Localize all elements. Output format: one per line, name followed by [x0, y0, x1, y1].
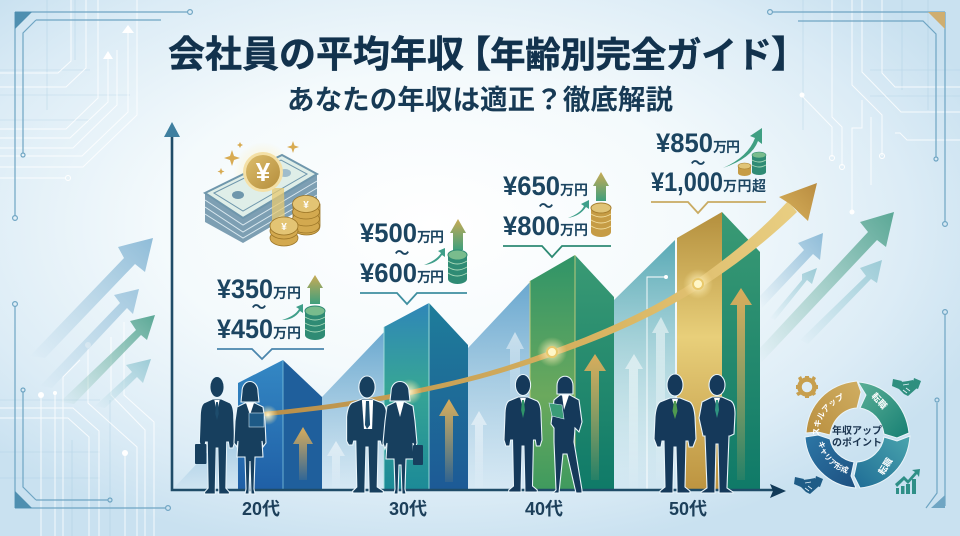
- decorative arrows right: [760, 212, 894, 364]
- age labels: 20代: [242, 499, 280, 519]
- icon: arrow and coins: [723, 128, 766, 176]
- title: 会社員の平均年収: [168, 24, 464, 78]
- price label: 50s: ～: [690, 152, 706, 173]
- price label: 30s: ¥600: [360, 258, 417, 288]
- person: man 40s: [504, 374, 542, 492]
- segment: job change: [858, 382, 909, 438]
- price label: 50s: ¥1,000: [651, 167, 723, 197]
- price label: 20s: 万円: [273, 283, 301, 303]
- bar: 30s: [322, 303, 468, 490]
- sparkles: [218, 141, 299, 175]
- money icon: ¥: [281, 222, 287, 233]
- person: woman 40s: [549, 376, 582, 493]
- segment: promotion: [854, 436, 910, 488]
- person: woman 20s: [234, 382, 266, 494]
- money icon: [205, 141, 320, 246]
- icon: handshake blue: [794, 476, 823, 494]
- price label: 40s: [503, 171, 611, 257]
- icon: arrow and coins: [282, 275, 325, 340]
- price label: 40s: 万円: [560, 180, 588, 200]
- price label: 40s: ～: [538, 195, 554, 216]
- price label: 20s: ～: [251, 296, 267, 317]
- title: 年齢別完全ガイド: [490, 27, 772, 78]
- label: skill up: スキルアップ: [813, 393, 842, 436]
- price label: 50s: [651, 128, 766, 213]
- decorative arrows left: [30, 238, 155, 408]
- price label: 20s: [217, 274, 325, 359]
- center label: のポイント: [832, 434, 882, 449]
- icon: arrow and coins: [568, 172, 611, 237]
- icon: gear: [796, 376, 818, 398]
- price label: 20s: 万円: [273, 323, 301, 343]
- subtitle: あなたの年収は適正？徹底解説: [287, 77, 674, 117]
- label: promotion: 転職: [875, 455, 895, 477]
- age labels: [242, 499, 707, 519]
- center label: [832, 422, 882, 449]
- title: 】: [771, 24, 808, 78]
- age labels: 30代: [389, 499, 427, 519]
- price label: 40s: ¥650: [503, 171, 560, 201]
- price label: 40s: ¥800: [503, 211, 560, 241]
- donut: career points: [804, 380, 910, 488]
- icon: arrow and coins: [424, 219, 467, 284]
- age labels: 50代: [669, 499, 707, 519]
- price label: 40s: 万円: [560, 220, 588, 240]
- person: man 50s arms crossed: [699, 374, 735, 493]
- price label: 50s: 万円超: [723, 176, 766, 196]
- money icon: ¥: [303, 200, 309, 211]
- segment: career: [805, 435, 856, 488]
- price label: 30s: 万円: [417, 267, 444, 287]
- center label: 年収アップ: [832, 422, 882, 437]
- price label: 30s: 万円: [417, 227, 444, 247]
- price label: 30s: ～: [394, 242, 410, 263]
- price label: 30s: [360, 218, 467, 304]
- person: man 20s: [195, 376, 235, 494]
- price label: 20s: ¥450: [217, 314, 273, 344]
- coin with yen: ¥: [256, 157, 271, 187]
- axes: [164, 122, 786, 498]
- growth curve arrow: [245, 183, 817, 425]
- bar: 20s: [172, 360, 322, 490]
- bar chart: [172, 212, 760, 490]
- icon: handshake green: [892, 378, 921, 396]
- price label: 30s: ¥500: [360, 218, 417, 248]
- segment: skill up: [806, 381, 861, 435]
- coin stacks: [270, 196, 320, 246]
- age labels: 40代: [525, 499, 563, 519]
- label: career: キャリア形成: [818, 442, 849, 474]
- people: [195, 374, 735, 494]
- bar: 40s: [468, 255, 614, 490]
- icon: growth chart: [895, 469, 920, 494]
- person: man 50s: [654, 374, 696, 493]
- curve markers: [258, 269, 713, 425]
- title: 【: [454, 24, 491, 78]
- person: woman 30s: [383, 382, 423, 494]
- label: job change: 転職: [869, 390, 890, 412]
- title: [168, 24, 808, 78]
- price label: 50s: ¥850: [656, 128, 713, 158]
- price label: 20s: ¥350: [217, 274, 273, 304]
- person: man 30s: [347, 376, 387, 493]
- price label: 50s: 万円: [713, 137, 740, 157]
- bar: 50s: [614, 212, 760, 490]
